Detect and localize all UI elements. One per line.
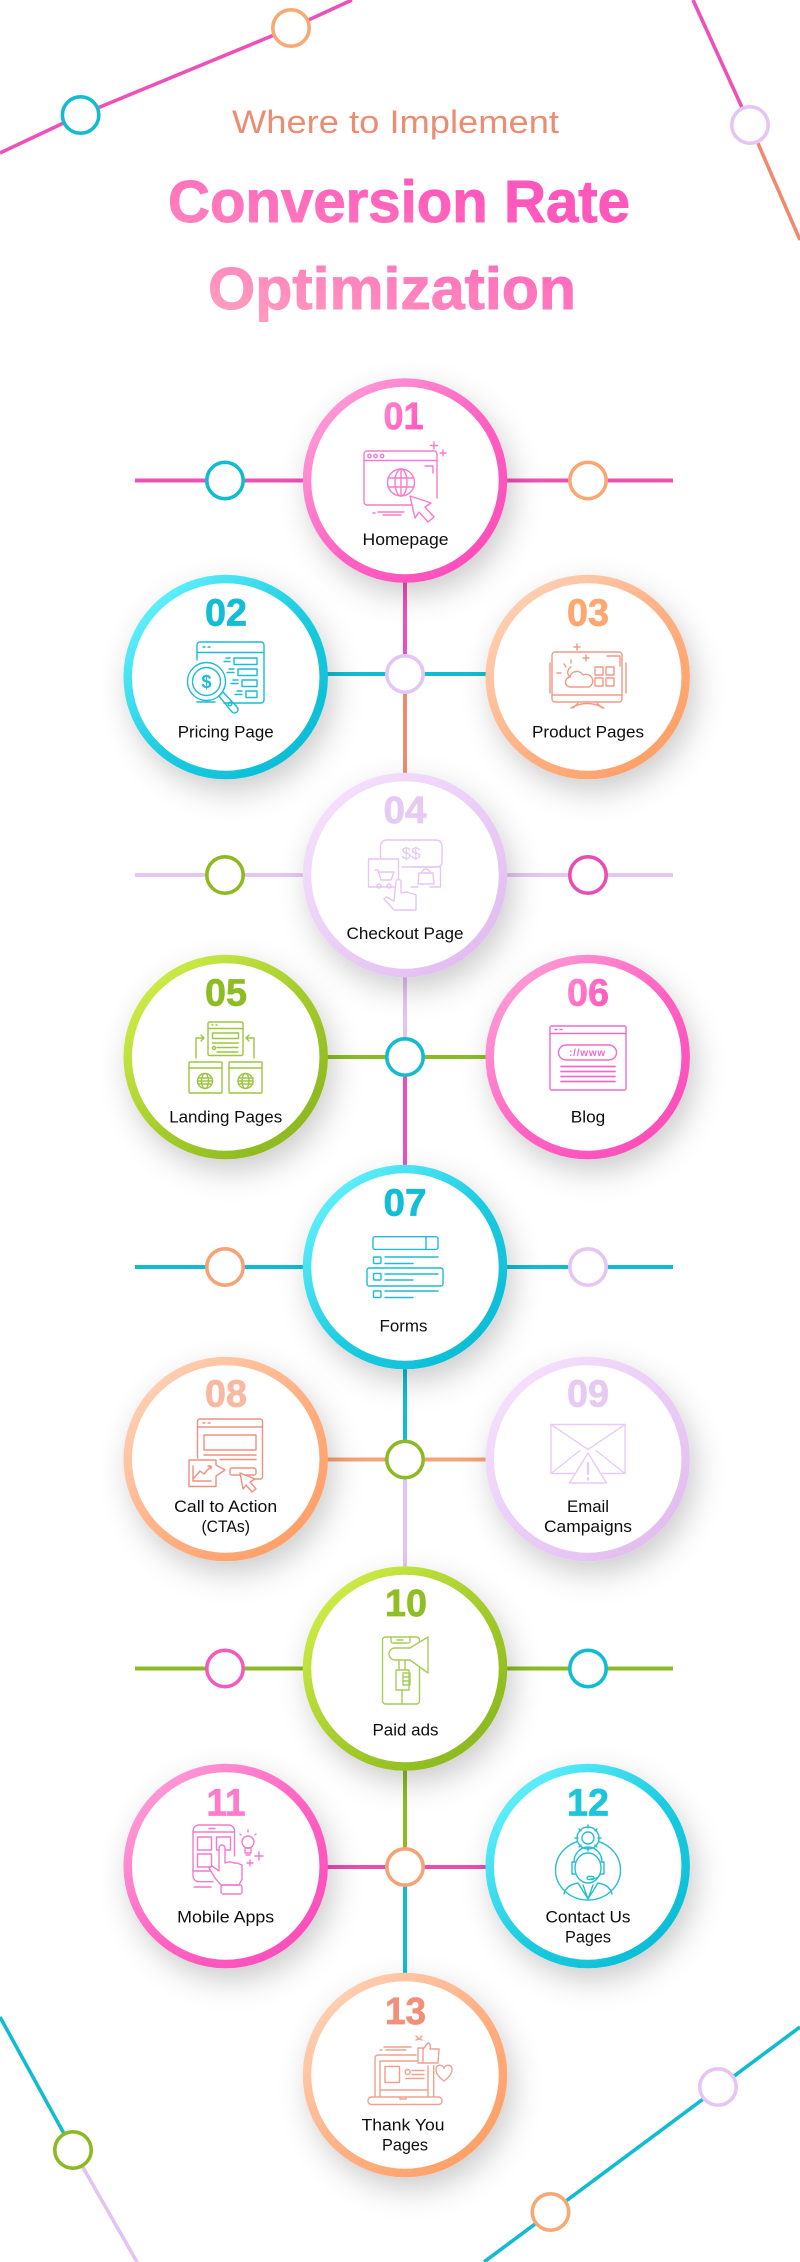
label xyxy=(544,1497,632,1536)
corner line: top right xyxy=(693,0,800,240)
panel: 07 Forms xyxy=(307,1169,503,1365)
icon: laptop thumbs up xyxy=(368,2036,452,2104)
panel: 11 Mobile Apps xyxy=(128,1768,324,1964)
panel: 08 Call to Action xyxy=(128,1361,324,1557)
label: Forms xyxy=(380,1317,428,1336)
number 05: 05 xyxy=(205,973,247,1015)
label: (CTAs) xyxy=(201,1517,250,1536)
number 06: 06 xyxy=(567,973,609,1015)
central vertical connector xyxy=(403,580,407,1975)
label: Blog xyxy=(571,1108,605,1127)
icon: mobile app touch xyxy=(193,1825,263,1894)
label: Pages xyxy=(565,1928,611,1947)
icon: envelope with alert xyxy=(551,1424,625,1483)
heading line 1: Conversion Rate xyxy=(168,169,630,235)
title xyxy=(168,104,630,322)
icon: call to action xyxy=(189,1419,262,1492)
panel: 04 Checkout Page xyxy=(307,777,503,973)
label: Email xyxy=(567,1497,609,1516)
icon: monitor with weather and grid xyxy=(550,644,626,708)
icon: phone with megaphone xyxy=(382,1637,428,1704)
connectors row 3 xyxy=(135,1249,673,1478)
label: Homepage xyxy=(362,530,448,549)
label: Pricing Page xyxy=(178,723,274,742)
panel: 12 Contact Us Pages xyxy=(490,1768,686,1964)
connectors row 4 xyxy=(135,1650,673,1885)
icon url text: ://www xyxy=(569,1048,606,1059)
icon: browser globe with cursor xyxy=(364,442,446,522)
corner line: bottom right xyxy=(484,2027,800,2262)
number 10: 10 xyxy=(385,1583,427,1625)
icon currency sign: $ xyxy=(201,672,212,692)
label xyxy=(362,2116,444,2155)
label: Mobile Apps xyxy=(177,1908,274,1927)
panel: 09 Email Campaigns xyxy=(490,1361,686,1557)
panel: 02 Pricing Page xyxy=(128,579,324,775)
icon: checkout xyxy=(368,840,442,910)
number 04: 04 xyxy=(384,790,426,832)
connectors row 1 xyxy=(135,462,673,692)
label: Pages xyxy=(382,2136,428,2155)
panel: 13 Thank You Pages xyxy=(307,1977,503,2173)
number 07: 07 xyxy=(384,1183,426,1225)
icon dollar signs: $$ xyxy=(402,844,421,863)
heading line 2: Optimization xyxy=(208,256,576,322)
icon: blog page xyxy=(550,1026,626,1090)
number 08: 08 xyxy=(205,1374,247,1416)
panel: 03 Product Pages xyxy=(490,579,686,775)
label xyxy=(546,1908,630,1947)
number 02: 02 xyxy=(205,593,247,635)
label: Thank You xyxy=(362,2116,444,2135)
icon: support agent with gear xyxy=(556,1825,620,1900)
label: Landing Pages xyxy=(169,1108,282,1127)
number 12: 12 xyxy=(567,1783,609,1825)
connectors row 2 xyxy=(135,857,673,1075)
label: Call to Action xyxy=(174,1497,277,1516)
number 11: 11 xyxy=(206,1783,246,1825)
subtitle: Where to Implement: Where to Implement xyxy=(232,104,559,140)
corner line: top left xyxy=(0,0,352,153)
label: Contact Us xyxy=(546,1908,630,1927)
icon: pricing magnifier xyxy=(188,642,264,713)
panel: 10 Paid ads xyxy=(307,1570,503,1766)
number 01: 01 xyxy=(384,396,424,438)
panel: 05 Landing Pages xyxy=(128,959,324,1155)
corner line: bottom left xyxy=(0,2017,137,2262)
label xyxy=(174,1497,277,1536)
label: Product Pages xyxy=(532,723,644,742)
number 03: 03 xyxy=(567,593,609,635)
number 13: 13 xyxy=(385,1991,426,2033)
label: Campaigns xyxy=(544,1517,632,1536)
label: Checkout Page xyxy=(346,924,464,943)
panel: 01 Homepage xyxy=(307,382,503,578)
icon: landing pages xyxy=(189,1022,262,1093)
label: Paid ads xyxy=(372,1721,438,1740)
icon: form xyxy=(367,1237,443,1298)
panel: 06 Blog xyxy=(490,959,686,1155)
number 09: 09 xyxy=(567,1374,609,1416)
